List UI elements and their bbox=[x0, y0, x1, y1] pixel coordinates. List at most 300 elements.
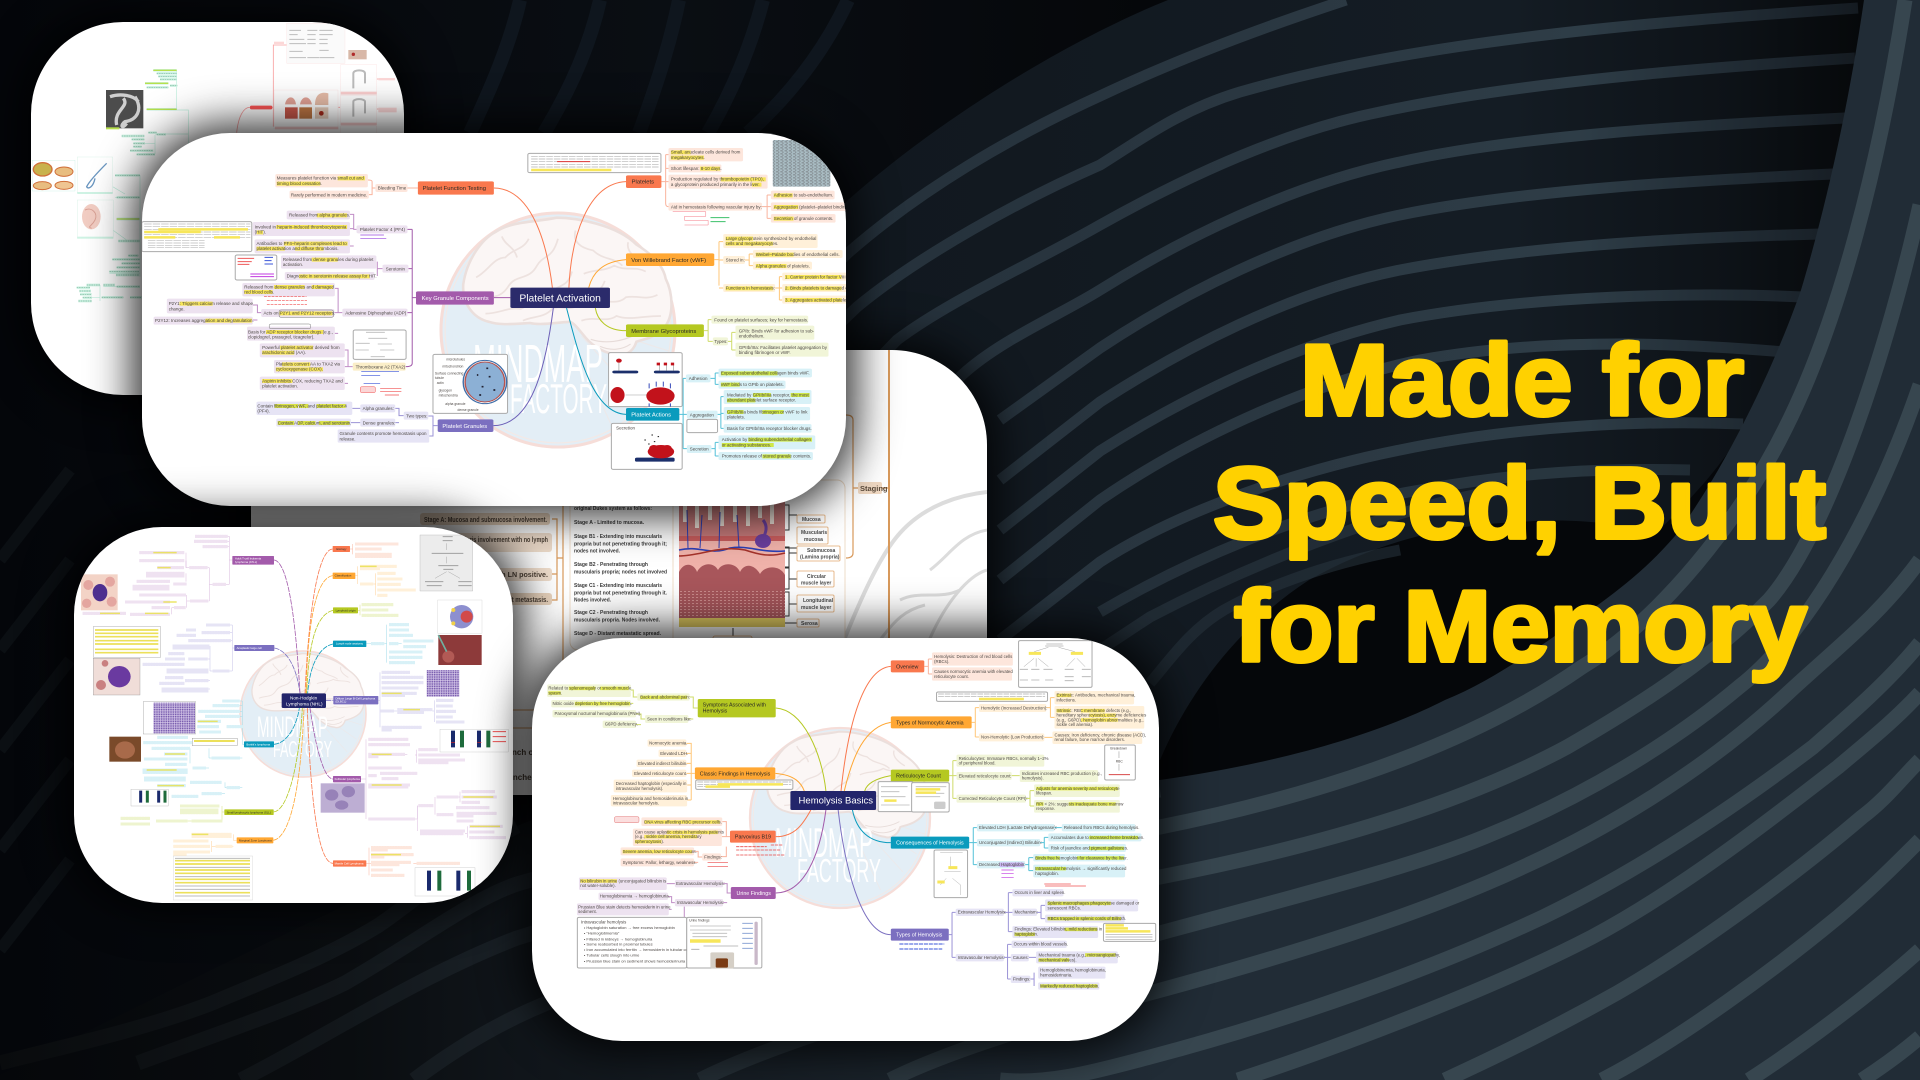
note box: intravascular hemolysis bbox=[577, 917, 692, 968]
layer labels: mucosa bbox=[804, 537, 823, 543]
branch: Key Granule Components: Diagnostic in serotonin release assay for HIT. bbox=[287, 274, 377, 279]
branch: Classic Findings in Hemolysis: Classic Findings in Hemolysis bbox=[700, 771, 771, 777]
branch: Key Granule Components bbox=[154, 211, 494, 390]
image: platelet cell diagram: glycogen bbox=[439, 389, 452, 393]
branch: Key Granule Components: red blood cells. bbox=[244, 289, 274, 294]
pale node bars: purple bbox=[83, 536, 506, 838]
branch: Membrane Glycoproteins: Found on platelet surfaces; key for hemostasis. bbox=[714, 317, 808, 322]
inner note panel: Dukes staging text bbox=[570, 480, 845, 650]
brain watermark outline bbox=[840, 492, 987, 650]
branch: red pathology node bbox=[237, 42, 397, 133]
branch: Types of Hemolysis bbox=[891, 889, 1140, 990]
branch: Urine Findings: sediment. bbox=[578, 909, 597, 914]
branch: Platelet Function Testing: Rarely performed in modern medicine. bbox=[291, 192, 367, 197]
layer labels: Submucosa bbox=[807, 548, 836, 554]
watermark: brain: MINDMAP bbox=[775, 819, 873, 866]
staging connector lines bbox=[505, 350, 889, 800]
branch: Symptoms Associated with Hemolysis: Related to splenomegaly or smooth muscle bbox=[548, 686, 632, 691]
image: x-ray bbox=[106, 90, 143, 129]
branch: Parvovirus B19 bbox=[621, 817, 776, 866]
images: diagrams right bbox=[321, 535, 508, 896]
branch: Platelets: Adhesion to sub-endothelium. bbox=[774, 193, 833, 198]
branch: Reticulocyte Count: Adjusts for anemia severity and reticulocyte bbox=[1036, 786, 1120, 791]
branch: Consequences of Hemolysis: Decreased Haptoglobin: bbox=[979, 862, 1025, 867]
watermark: brain bbox=[240, 651, 366, 777]
branch: Reticulocyte Count: hemolysis). bbox=[1022, 776, 1044, 781]
branch: Classic Findings in Hemolysis: intravascular hemolysis. bbox=[613, 801, 659, 806]
image: platelet cell diagram: actin bbox=[437, 381, 444, 385]
branch: Platelets bbox=[626, 148, 851, 223]
branch: Key Granule Components: Key Granule Components bbox=[422, 296, 489, 302]
watermark: brain: FACTORY bbox=[510, 375, 607, 422]
branch: Classic Findings in Hemolysis: Elevated indirect bilirubin. bbox=[638, 761, 687, 766]
branch: Reticulocyte Count: Reticulocytes: Immature RBCs, normally 1–2% bbox=[959, 756, 1049, 761]
branch: Key Granule Components: Released from alpha granules. bbox=[289, 213, 350, 218]
pale node bars: violet bbox=[143, 625, 464, 730]
branch: Classic Findings in Hemolysis: Normocytic anemia. bbox=[649, 741, 687, 746]
central node: Non-Hodgkin bbox=[290, 696, 318, 701]
watermark: brain: MINDMAP bbox=[257, 711, 328, 744]
main nodes: left branches: Anaplastic large cell bbox=[237, 646, 262, 650]
images: micrographs left bbox=[81, 574, 253, 900]
staging tags: Stage D: Any stage with distant metastasis. bbox=[424, 595, 548, 604]
branch: Classic Findings in Hemolysis: Elevated reticulocyte count. bbox=[634, 771, 687, 776]
branch: Platelets: Small, anucleate cells derived from bbox=[671, 150, 741, 155]
branch: Platelet Actions: Aggregation bbox=[690, 412, 714, 417]
branch: Von Willebrand Factor: Stored in: bbox=[726, 258, 745, 263]
branch: Types of Normocytic Anemia: Causes: Iron deficiency, chronic disease (ACD), bbox=[1054, 732, 1146, 737]
branch: Key Granule Components: arachidonic acid (AA). bbox=[262, 350, 306, 355]
branch: Key Granule Components: P2Y12: Increases aggregation and degranulation. bbox=[155, 318, 254, 323]
image: platelet cell diagram: Surface connecting bbox=[435, 371, 464, 375]
main nodes: right branches: (DLBCL) bbox=[335, 700, 346, 704]
branch: Consequences of Hemolysis: Elevated LDH (Lactate Dehydrogenase): bbox=[979, 825, 1057, 830]
branch: Classic Findings in Hemolysis: Hemoglobinuria and hemosiderinuria in bbox=[613, 796, 689, 801]
image: overview flowchart bbox=[1019, 641, 1092, 687]
note box: Billroth bbox=[1103, 923, 1156, 941]
watermark: brain bbox=[441, 213, 675, 447]
staging tags: Stage C: Any depth with LN positive. bbox=[424, 570, 548, 579]
note box: intravascular hemolysis: Intravascular hemolysis bbox=[581, 919, 626, 924]
inner note panel: Dukes staging text: propria but not penetrating through it. bbox=[574, 590, 667, 596]
note box: intravascular hemolysis: • Prussian blue stain on sediment shows hemosiderinuria bbox=[584, 958, 686, 963]
main nodes: right branches: Classification bbox=[335, 574, 352, 578]
branch: Platelet Granules: Granule contents promote hemostasis upon bbox=[340, 431, 427, 436]
branch: Types of Normocytic Anemia: sickle cell anemia). bbox=[1057, 722, 1093, 727]
images: reticulocyte notes: Breakdown bbox=[1110, 746, 1127, 750]
branch: Platelet Granules: (PF4). bbox=[257, 409, 270, 414]
branch: Membrane Glycoproteins bbox=[626, 316, 828, 357]
branch: Key Granule Components: Acts on P2Y1 and P2Y12 receptors. bbox=[264, 311, 335, 316]
central node: Hemolysis Basics bbox=[799, 795, 873, 806]
image: endoscope bbox=[77, 157, 113, 194]
red handwritten note bbox=[673, 212, 729, 225]
branch: Consequences of Hemolysis: Released from RBCs during hemolysis. bbox=[1064, 825, 1139, 830]
branch: Membrane Glycoproteins: GPIIb/IIIa: Facilitates platelet aggregation by bbox=[739, 345, 828, 350]
branch: Key Granule Components: Platelets convert AA to TXA2 via bbox=[276, 362, 341, 367]
branch: Urine Findings: Prussian Blue stain detects hemosiderin in urine bbox=[578, 904, 671, 909]
branch: Key Granule Components: Antibodies to PF4–heparin complexes lead to bbox=[256, 241, 347, 246]
central node bbox=[282, 693, 326, 708]
central node bbox=[510, 288, 610, 308]
branch: Symptoms Associated with Hemolysis: Symptoms Associated with bbox=[703, 703, 766, 709]
inner note panel: Dukes staging text: Stage B1 - Extending into muscularis bbox=[574, 534, 663, 540]
branch: Von Willebrand Factor: Large glycoprotein synthesized by endothelial bbox=[726, 236, 816, 241]
branch: Platelet Granules: Contain fibrinogen, vWF, and platelet factor 4 bbox=[257, 403, 347, 408]
inner note panel: Dukes staging text: Stage B2 - Penetrating through bbox=[574, 562, 648, 568]
image: platelet smear bbox=[773, 140, 830, 187]
layer labels: muscle layer bbox=[801, 605, 831, 611]
branch: Key Granule Components: Powerful platelet activator derived from bbox=[262, 345, 340, 350]
inner note panel: Dukes staging text: muscularis propria; nodes not involved bbox=[574, 569, 667, 575]
watermark: brain bbox=[750, 728, 930, 908]
branch: Platelet Actions: Promotes release of stored granule contents. bbox=[722, 454, 811, 459]
layer labels: Serosa bbox=[801, 621, 818, 627]
layer labels: Longitudinal bbox=[803, 598, 834, 604]
inner note panel: Dukes staging text: original Dukes system as follows: bbox=[574, 506, 652, 512]
branch: Consequences of Hemolysis: Risk of jaundice and pigment gallstones. bbox=[1051, 846, 1128, 851]
branch: Membrane Glycoproteins: Membrane Glycoproteins bbox=[631, 329, 696, 335]
branch: Symptoms Associated with Hemolysis: G6PD deficiency. bbox=[605, 722, 638, 727]
central node: Platelet Activation bbox=[519, 294, 601, 305]
branch: Symptoms Associated with Hemolysis: Nitric oxide depletion by free hemoglobin. bbox=[552, 701, 632, 706]
branch: Platelets: Secretion of granule contents. bbox=[774, 216, 833, 221]
branch: Key Granule Components: change. bbox=[169, 306, 185, 311]
image: polyp cross-sections bbox=[32, 160, 75, 191]
branch: Key Granule Components: Adenosine Diphosphate (ADP) bbox=[345, 310, 407, 315]
branch: Types of Hemolysis: Mechanical trauma (e.g., microangiopathy, bbox=[1039, 952, 1120, 957]
branch: Platelet Actions: or activating substances. bbox=[722, 442, 771, 447]
branch: Von Willebrand Factor bbox=[626, 234, 871, 304]
inner note panel: Dukes staging text: Stage D - Distant metastatic spread. bbox=[574, 631, 661, 637]
image: platelet cell diagram: mitochondrion bbox=[442, 364, 463, 368]
connectors: central curves bbox=[273, 549, 333, 863]
inner note panel: Dukes staging text: muscularis propria. Nodes involved. bbox=[574, 617, 660, 623]
images: colon diagrams bbox=[341, 65, 377, 143]
branch: Urine Findings: Hemoglobinemia → hemoglobinuria. bbox=[600, 894, 670, 899]
branch: Platelet Actions: vWF binds to GPIb on platelets. bbox=[721, 382, 784, 387]
branch: Platelet Actions: Secretion bbox=[690, 446, 709, 451]
branch: Types of Hemolysis: Splenic macrophages phagocytose damaged or bbox=[1048, 901, 1140, 906]
branch: Key Granule Components: Involved in heparin-induced thrombocytopenia bbox=[255, 224, 347, 229]
main nodes: left branches: Marginal Zone Lymphoma bbox=[239, 838, 272, 842]
branch: Symptoms Associated with Hemolysis: Back and abdominal pain: bbox=[640, 695, 690, 700]
branch: Types of Normocytic Anemia: Intrinsic: RBC membrane defects (e.g., bbox=[1057, 708, 1131, 713]
branch: Key Granule Components: platelet activation and diffuse thrombosis. bbox=[256, 246, 339, 251]
inner note panel: Dukes staging text: Stage C2 - Penetrating through bbox=[574, 610, 648, 616]
images: reticulocyte notes: RBC bbox=[1116, 759, 1123, 763]
branch: Overview: Causes normocytic anemia with elevated bbox=[934, 669, 1013, 674]
branch: Classic Findings in Hemolysis bbox=[611, 739, 793, 806]
main nodes: left branches: Adult T-cell leukemia bbox=[235, 557, 261, 561]
branch: Reticulocyte Count: Elevated reticulocyte count: bbox=[959, 773, 1012, 778]
note box: platelet text bbox=[528, 153, 661, 173]
branch: Key Granule Components: Released from dense granules and damaged bbox=[244, 284, 334, 289]
branch: Key Granule Components: clopidogrel, prasugrel, ticagrelor). bbox=[248, 335, 315, 340]
layer labels bbox=[713, 505, 840, 648]
highlights bbox=[100, 553, 500, 855]
branch: Von Willebrand Factor: Alpha granules of platelets. bbox=[756, 263, 810, 268]
note box: intravascular hemolysis: • Some reabsorbed in proximal tubules bbox=[584, 942, 653, 947]
branch: Symptoms Associated with Hemolysis bbox=[547, 684, 776, 728]
layer labels: Circular bbox=[807, 574, 826, 580]
branch: Platelet Function Testing: Measures platelet function via small cut and bbox=[277, 176, 364, 181]
note box: hemolysis text bbox=[937, 692, 1048, 701]
branch: Overview: (RBCs). bbox=[934, 659, 949, 664]
branch: Reticulocyte Count: RPI < 2%: suggests inadequate bone marrow bbox=[1036, 801, 1124, 806]
branch: Types of Hemolysis: haptoglobin. bbox=[1014, 932, 1038, 937]
images: reticulocyte notes bbox=[878, 745, 1135, 812]
branch: Reticulocyte Count: Indicates increased RBC production (e.g., bbox=[1022, 771, 1102, 776]
branch: Classic Findings in Hemolysis: Decreased haptoglobin (especially in bbox=[616, 781, 687, 786]
branch: Consequences of Hemolysis bbox=[891, 824, 1144, 877]
panel: colorectal staging mind map (behind) bbox=[251, 350, 987, 795]
watermark: brain: FACTORY bbox=[797, 852, 881, 889]
branch: Urine Findings: No bilirubin in urine (unconjugated bilirubin is bbox=[580, 878, 666, 883]
main nodes: left branches: Burkitt's lymphoma bbox=[246, 742, 271, 746]
images: platelet action diagrams bbox=[609, 353, 718, 469]
branch: Platelets: Platelets bbox=[632, 180, 654, 186]
panel: Non-Hodgkin Lymphoma mind map bbox=[74, 527, 513, 903]
central node: Lymphoma (NHL) bbox=[286, 701, 323, 706]
layer labels: Muscularis bbox=[801, 530, 827, 536]
branch: Symptoms Associated with Hemolysis: Paroxysmal nocturnal hemoglobinuria (PNH). bbox=[554, 711, 641, 716]
main nodes: right branches: Lymphoid origin bbox=[336, 608, 356, 612]
branch: Platelets: Short lifespan: 8-10 days. bbox=[671, 166, 722, 171]
branch: Consequences of Hemolysis: Intravascular hemolysis → significantly reduced bbox=[1035, 866, 1127, 871]
pale node bars: coral bbox=[355, 544, 460, 875]
branch: Overview: Overview bbox=[896, 664, 918, 670]
branch: Membrane Glycoproteins: endothelium. bbox=[739, 333, 764, 338]
main nodes: right branches: Diffuse Large B-Cell Lymphoma bbox=[335, 696, 376, 700]
staging tags: Stage B: Muscularis involvement with no lymph bbox=[424, 535, 548, 544]
branch: Types of Hemolysis: Extravascular Hemolysis: bbox=[958, 910, 1006, 915]
branch: Types of Hemolysis: Causes: bbox=[1013, 955, 1029, 960]
branch: Key Granule Components: Platelet Factor 4 (PF4) bbox=[360, 227, 405, 232]
branch: Platelets: megakaryocytes. bbox=[671, 155, 705, 160]
image: platelet cell diagram: mitochondria bbox=[439, 394, 458, 398]
inner note panel: Dukes staging text: Stage A - Limited to mucosa. bbox=[574, 520, 644, 526]
tag: Staging: Staging bbox=[860, 484, 888, 493]
connectors: central curves bbox=[775, 666, 891, 935]
branch: Consequences of Hemolysis: Unconjugated (Indirect) Bilirubin: bbox=[979, 840, 1042, 845]
branch: Platelet Actions: abundant platelet surface receptor. bbox=[727, 398, 796, 403]
main nodes: left branches: Small lymphocytic lymphoma (SLL) bbox=[227, 810, 271, 814]
staging tags: branches bbox=[500, 773, 537, 782]
branch: Platelet Actions: Mediated by GPIIb/IIIa receptor, the most bbox=[727, 392, 810, 397]
branch: Reticulocyte Count: of peripheral blood. bbox=[959, 761, 996, 766]
branch: Platelet Actions: Exposed subendothelial collagen binds vWF. bbox=[721, 371, 810, 376]
branch: Symptoms Associated with Hemolysis: spasm. bbox=[548, 690, 562, 695]
branch: Von Willebrand Factor: 1. Carrier protein for factor VIII. bbox=[785, 274, 846, 279]
branch: Types of Hemolysis: Occurs in liver and spleen. bbox=[1014, 890, 1065, 895]
branch: Overview: Hemolysis: Destruction of red blood cells bbox=[934, 654, 1012, 659]
main nodes: right branches: Mantle Cell Lymphoma bbox=[335, 861, 364, 865]
layer labels: muscle layer bbox=[801, 580, 831, 586]
main nodes: left branches bbox=[224, 556, 274, 843]
branch: Key Granule Components: platelet activation. bbox=[262, 383, 298, 388]
branch: Reticulocyte Count: Reticulocyte Count bbox=[896, 774, 941, 780]
branch: Platelet Actions bbox=[626, 369, 815, 460]
branch: Platelet Actions: GPIIb/IIIa binds fibrinogen or vWF to link bbox=[727, 409, 808, 414]
branch: Platelet Actions: platelets. bbox=[727, 414, 745, 419]
panel: Hemolysis Basics mind map bbox=[532, 638, 1159, 1041]
image: platelet cell diagram: microtubules bbox=[446, 358, 465, 362]
title: Made for Speed, Built for Memory: Made for bbox=[1300, 325, 1744, 437]
image: heme pathway, handwritten notes bbox=[899, 850, 1086, 949]
note boxes: left side bbox=[142, 222, 406, 395]
branch: Membrane Glycoproteins: Types: bbox=[714, 339, 727, 344]
branch: Key Granule Components: Aspirin inhibits COX, reducing TXA2 and bbox=[262, 378, 343, 383]
note box: intravascular hemolysis: • Haptoglobin saturation → free excess hemoglobin bbox=[584, 925, 675, 930]
branch: Key Granule Components: Basis for ADP receptor blocker drugs (e.g., bbox=[248, 329, 333, 334]
branch: Types of Hemolysis: Intravascular Hemolysis: bbox=[958, 955, 1005, 960]
branch: Platelets: a glycoprotein produced primarily in the liver. bbox=[671, 182, 760, 187]
branch: Platelet Granules: release. bbox=[340, 436, 356, 441]
watermark: brain: MINDMAP bbox=[473, 334, 603, 394]
branch: Parvovirus B19: (e.g., sickle cell anemia, hereditary bbox=[635, 834, 702, 839]
note box: intravascular hemolysis: • "Hemoglobinemia" bbox=[584, 931, 620, 936]
image: platelet cell diagram: dense granule bbox=[458, 408, 479, 412]
branch: Von Willebrand Factor: Von Willebrand Factor (vWF) bbox=[631, 258, 706, 264]
main nodes: right branches: Lymph node anatomy bbox=[336, 642, 364, 646]
branch: Consequences of Hemolysis: Binds free hemoglobin for clearance by the liver. bbox=[1035, 855, 1128, 860]
branch: Reticulocyte Count: lifespan. bbox=[1036, 791, 1052, 796]
table: comparison bbox=[287, 23, 367, 63]
branch: Platelets: Aid in hemostasis following vascular injury by: bbox=[671, 204, 762, 209]
inner note panel: Dukes staging text: Nodes involved. bbox=[574, 598, 611, 604]
watermark: brain: FACTORY bbox=[273, 736, 332, 762]
branch: Platelet Function Testing: Platelet Function Testing bbox=[423, 186, 486, 192]
branch: Platelet Function Testing: Bleeding Time bbox=[378, 186, 407, 191]
branch: Platelet Actions: Basis for GPIIb/IIIa receptor blocker drugs. bbox=[727, 426, 812, 431]
pale node bars: amber bbox=[173, 566, 416, 854]
branch: Urine Findings bbox=[577, 877, 776, 917]
branch: Platelet Function Testing bbox=[275, 174, 494, 199]
branch: Types of Hemolysis: Occurs within blood vessels. bbox=[1014, 942, 1068, 947]
branch: Platelets: Production regulated by thrombopoietin (TPO), bbox=[671, 177, 764, 182]
branch: Classic Findings in Hemolysis: Elevated LDH. bbox=[660, 751, 688, 756]
handwritten notes: parvovirus bbox=[614, 817, 785, 867]
branch: Types of Normocytic Anemia bbox=[891, 691, 1146, 744]
layer labels: (Lamina propria) bbox=[800, 554, 840, 560]
branch: Urine Findings: Urine Findings bbox=[737, 891, 771, 897]
inner note panel: Dukes staging text: nodes not involved. bbox=[574, 549, 620, 555]
image: colon wall cross-section bbox=[679, 500, 785, 627]
branch: Platelet Granules bbox=[256, 402, 493, 443]
branch: Reticulocyte Count: response. bbox=[1036, 806, 1055, 811]
branch: Platelet Granules: Alpha granules: bbox=[363, 406, 394, 411]
branch: Types of Normocytic Anemia: Hemolytic (Increased Destruction): bbox=[981, 705, 1047, 710]
branch: Parvovirus B19: Can cause aplastic crisis in hemolysis patients bbox=[635, 830, 724, 835]
branch: Key Granule Components: P2Y1: Triggers calcium release and shape bbox=[169, 301, 253, 306]
branch: Membrane Glycoproteins: GPIb: Binds vWF for adhesion to sub- bbox=[739, 328, 815, 333]
branch: Types of Normocytic Anemia: renal failure, bone marrow disorders. bbox=[1054, 737, 1125, 742]
branch: Overview: reticulocyte count. bbox=[934, 674, 969, 679]
branch: Key Granule Components: Thromboxane A2 (TXA2) bbox=[356, 364, 406, 369]
panel: Platelet Activation mind map bbox=[142, 133, 846, 506]
connectors: central curves bbox=[406, 182, 626, 426]
mind map branches: green tree bbox=[77, 70, 188, 301]
branch: Classic Findings in Hemolysis: intravascular hemolysis). bbox=[616, 786, 663, 791]
branch: Platelet Actions: Platelet Actions bbox=[631, 412, 671, 418]
title: Made for Speed, Built for Memory: for Memory bbox=[1234, 571, 1807, 683]
branch: Consequences of Hemolysis: haptoglobin. bbox=[1035, 871, 1059, 876]
branch: Platelet Actions: Adhesion bbox=[689, 376, 708, 381]
branch: Reticulocyte Count bbox=[891, 755, 1124, 813]
branch: Types of Normocytic Anemia: Types of Normocytic Anemia bbox=[896, 720, 964, 726]
branch: Types of Normocytic Anemia: hereditary spherocytosis), enzyme deficiencies bbox=[1057, 713, 1146, 718]
image: platelet cell diagram: tubule bbox=[435, 376, 444, 380]
note box: intravascular hemolysis: • Iron accumulated into ferritin → hemosiderin in tubular cells bbox=[584, 947, 692, 952]
title: Made for Speed, Built for Memory: Speed, Built bbox=[1213, 448, 1826, 560]
branch: Types of Hemolysis: mechanical valves). bbox=[1039, 957, 1077, 962]
branch: Parvovirus B19: Parvovirus B19 bbox=[735, 835, 771, 841]
staging tags: Each branch of bbox=[478, 748, 536, 757]
image: platelet cell diagram: alpha granule bbox=[445, 402, 466, 406]
inner note panel: Dukes staging text: propria but not penetrating through it; bbox=[574, 541, 667, 547]
branch: Types of Hemolysis: Types of Hemolysis bbox=[896, 933, 943, 939]
main nodes: left branches: lymphoma (ATLL) bbox=[235, 560, 257, 564]
branch: Platelet Granules: Contain ADP, calcium, and serotonin. bbox=[278, 420, 351, 425]
branch: Symptoms Associated with Hemolysis: Seen in conditions like: bbox=[647, 717, 691, 722]
inner note panel: Dukes staging text: Stage C1 - Extending into muscularis bbox=[574, 583, 663, 589]
branch: Platelet Actions: Activation by binding subendothelial collagen bbox=[722, 437, 812, 442]
branch: Types of Hemolysis: Findings: Elevated bilirubin, mild reductions in bbox=[1014, 927, 1103, 932]
branch: Von Willebrand Factor: cells and megakaryocytes. bbox=[726, 241, 778, 246]
branch: Types of Hemolysis: Findings: bbox=[1013, 977, 1030, 982]
branch: Von Willebrand Factor: Functions in hemostasis: bbox=[726, 286, 775, 291]
image: abdomen anatomy bbox=[77, 200, 113, 239]
branch: Parvovirus B19: Findings: bbox=[704, 854, 722, 859]
branch: Key Granule Components: (HIT). bbox=[255, 230, 266, 235]
branch: Types of Normocytic Anemia: Extrinsic: Antibodies, mechanical trauma, bbox=[1057, 693, 1135, 698]
images: platelet action diagrams: Secretion bbox=[616, 425, 636, 430]
main nodes: right branches: Follicular lymphoma bbox=[335, 777, 360, 781]
layer labels: Mucosa bbox=[802, 517, 821, 523]
branch: Types of Normocytic Anemia: infections. bbox=[1057, 697, 1076, 702]
branch: Types of Hemolysis: RBCs trapped in splenic cords of Billroth. bbox=[1048, 916, 1126, 921]
branch: Key Granule Components: activation. bbox=[283, 262, 303, 267]
branch: Types of Hemolysis: Hemoglobinemia, hemoglobinuria, bbox=[1040, 968, 1106, 973]
staging tags bbox=[420, 513, 552, 782]
pale node bars: teal bbox=[143, 625, 433, 796]
image: urine findings with sample jar: Urine findings bbox=[689, 919, 710, 923]
branch: Key Granule Components: Released from dense granules during platelet bbox=[283, 257, 374, 262]
note box: intravascular hemolysis: • Tubular cells slough into urine bbox=[584, 953, 640, 958]
branch: Parvovirus B19: Severe anemia, low reticulocyte count. bbox=[623, 849, 697, 854]
image: urine findings with sample jar bbox=[687, 917, 762, 968]
branch: Urine Findings: Intravascular Hemolysis: bbox=[677, 900, 724, 905]
main nodes: right branches: Etiology bbox=[336, 547, 347, 551]
branch: Parvovirus B19: spherocytosis). bbox=[635, 839, 664, 844]
branch: Platelet Granules: Dense granules: bbox=[363, 420, 395, 425]
panel: colorectal mind map (back, top left) bbox=[31, 22, 404, 395]
branch: Types of Hemolysis: hemosiderinuria. bbox=[1040, 973, 1072, 978]
staging tags: Stage A: Mucosa and submucosa involvement. bbox=[424, 515, 547, 524]
branch: Platelet Granules: Two types: bbox=[406, 413, 428, 418]
image: tumor types bbox=[274, 90, 338, 129]
note box: intravascular hemolysis: • Filtered in kidneys → hemoglobinuria bbox=[584, 936, 653, 941]
connectors: sub-branches bbox=[172, 536, 467, 875]
central node bbox=[790, 791, 876, 810]
branch: Overview bbox=[891, 652, 1013, 681]
branch: Urine Findings: Extravascular Hemolysis: bbox=[676, 881, 725, 886]
tag: Staging bbox=[858, 482, 888, 494]
image: platelet cell diagram bbox=[433, 354, 508, 413]
pale node bars: green bbox=[121, 605, 398, 824]
branch: Urine Findings: not water-soluble). bbox=[580, 883, 616, 888]
